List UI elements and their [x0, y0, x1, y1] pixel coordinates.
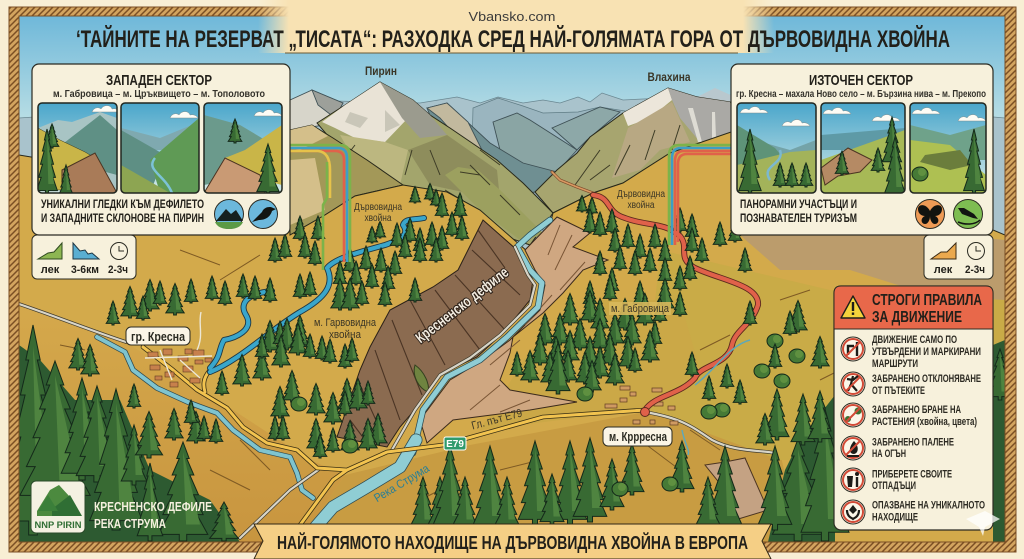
- east caption: [740, 199, 857, 225]
- east tan cliff: [420, 217, 608, 443]
- connector lines: west: [290, 145, 350, 270]
- terrain hachures: [60, 250, 840, 500]
- middle blue range: [472, 98, 626, 230]
- trailhead marker: [640, 408, 650, 416]
- east scene 3: [910, 103, 986, 195]
- label: Kresna gorge: Кресненско дефиле: [413, 264, 512, 347]
- label: Darvovidna hvoyna west: хвойна: [364, 213, 392, 224]
- mountain: Pirin: [317, 82, 553, 245]
- trail stats west: 3-6км: [71, 264, 99, 276]
- logo: NNP Pirin: [31, 481, 85, 533]
- icon: lizard: [954, 200, 982, 228]
- river Struma: [97, 220, 550, 530]
- trail stats east: лек: [934, 264, 953, 276]
- base ground: [19, 132, 1005, 542]
- label: Garvovidna hvoyna: [314, 317, 377, 341]
- label: Gabrovitsa: м. Габровица: [611, 303, 670, 315]
- panel: west sector: [32, 64, 290, 279]
- west caption: [41, 199, 204, 225]
- location caption: КРЕСНЕНСКО ДЕФИЛЕ: [94, 500, 212, 514]
- rule 1: ДВИЖЕНИЕ САМО ПО: [872, 334, 957, 346]
- east scene 2: [821, 103, 905, 197]
- village M. Kresna: [605, 386, 678, 425]
- rule 5: ОТПАДЪЦИ: [872, 480, 916, 492]
- connector lines: east: [669, 145, 731, 245]
- trail: blue west route: [210, 218, 424, 372]
- trail: red east route: [552, 172, 758, 410]
- rule 2: ЗАБРАНЕНО ОТКЛОНЯВАНЕ: [872, 373, 981, 385]
- watermark sparkle: [966, 511, 1000, 536]
- gray roads: [19, 247, 775, 538]
- icon: butterfly: [916, 200, 944, 228]
- rule 3: [841, 403, 977, 428]
- trees: east meadow: [685, 300, 829, 419]
- small stream: [682, 340, 750, 455]
- west heading: ЗАПАДЕН СЕКТОР: [106, 72, 212, 89]
- label: Darvovidna hvoyna east: [617, 189, 665, 211]
- central cliff: [337, 220, 533, 447]
- west scene 2: [121, 103, 199, 193]
- label: Darvovidna hvoyna east: хвойна: [628, 200, 655, 211]
- lower left forest backdrop: [19, 345, 240, 542]
- east scene frames: [737, 103, 986, 193]
- peak label: Vlahina: Влахина: [648, 72, 691, 84]
- far mountain range: [20, 92, 1004, 249]
- trees: east plateau forest: [510, 196, 752, 401]
- rules heading: ЗА ДВИЖЕНИЕ: [872, 309, 962, 326]
- rule 1: [841, 334, 981, 370]
- trail stats west: [38, 242, 128, 276]
- rule 1: УТВЪРДЕНИ И МАРКИРАНИ: [872, 346, 981, 358]
- panel: strict rules: [834, 286, 993, 530]
- sky: [20, 16, 1004, 118]
- label: Darvovidna hvoyna east: Дървовидна: [617, 189, 665, 200]
- rule 6: НАХОДИЩЕ: [872, 512, 918, 524]
- lower valley shading: [64, 385, 344, 542]
- peak label: Pirin: Пирин: [365, 66, 397, 78]
- rule 3: РАСТЕНИЯ (хвойна, цвета): [872, 416, 977, 428]
- icon: viewpoint: [214, 200, 244, 229]
- label: Darvovidna hvoyna west: Дървовидна: [354, 202, 402, 213]
- rule 5: ПРИБЕРЕТЕ СВОИТЕ: [872, 468, 952, 480]
- source label: Vbansko.com: [468, 9, 556, 24]
- icon: warning: [841, 296, 865, 318]
- east caption: ПОЗНАВАТЕЛЕН ТУРИЗЪМ: [740, 213, 857, 225]
- east caption: ПАНОРАМНИ УЧАСТЪЦИ И: [740, 199, 857, 211]
- bottom banner: [254, 524, 771, 559]
- rule 2: [841, 372, 981, 397]
- east scene 1: [737, 103, 816, 195]
- trees: lower left forest: [4, 325, 238, 541]
- road E79: [143, 347, 645, 525]
- west caption: И ЗАПАДНИТЕ СКЛОНОВЕ НА ПИРИН: [41, 213, 204, 225]
- mountain: Vlahina: [535, 88, 745, 213]
- label: Garvovidna hvoyna: м. Гарвовидна: [314, 317, 377, 329]
- west front ridge: [290, 125, 403, 235]
- west scene 3: [204, 103, 282, 195]
- rule 4: НА ОГЪН: [872, 448, 906, 460]
- rule 5: [841, 468, 952, 492]
- icon: bird: [248, 200, 278, 228]
- town label: M Kresna: [603, 427, 672, 446]
- rule 4: [841, 436, 954, 460]
- mountain layers behind: [290, 90, 620, 200]
- rule 3: ЗАБРАНЕНО БРАНЕ НА: [872, 404, 961, 416]
- bottom banner: НАЙ-ГОЛЯМОТО НАХОДИЩЕ НА ДЪРВОВИДНА ХВОЙНА В ЕВРОПА: [277, 532, 748, 553]
- trees: west plateau: [106, 184, 469, 458]
- east brown mountain under panel: [741, 236, 1004, 300]
- village Kresna: [145, 312, 212, 387]
- lower right forest backdrop: [768, 340, 1005, 542]
- rules heading: [872, 292, 982, 326]
- road sign E79: [444, 437, 466, 450]
- label: main road: Гл. път Е79: [470, 407, 524, 433]
- rule 2: ОТ ПЪТЕКИТЕ: [872, 385, 925, 397]
- rule 6: [841, 500, 985, 524]
- town label: Kresna: [126, 327, 190, 345]
- trail stats west: лек: [41, 264, 60, 276]
- town label: Kresna: гр. Кресна: [131, 330, 186, 344]
- road sign E79: E79: [446, 439, 464, 450]
- panel: east sector: [731, 64, 993, 279]
- west caption: УНИКАЛНИ ГЛЕДКИ КЪМ ДЕФИЛЕТО: [41, 199, 204, 211]
- title banner: [76, 0, 950, 53]
- east heading: ИЗТОЧЕН СЕКТОР: [809, 72, 913, 89]
- front ridge detail: [290, 125, 328, 225]
- rule 4: ЗАБРАНЕНО ПАЛЕНЕ: [872, 436, 954, 448]
- location caption: РЕКА СТРУМА: [94, 517, 166, 531]
- rule 1: МАРШРУТИ: [872, 358, 918, 370]
- west scene 1: [37, 103, 120, 195]
- rock bottom right: [705, 458, 768, 520]
- rules heading: СТРОГИ ПРАВИЛА: [872, 292, 982, 309]
- trail stats west: 2-3ч: [108, 264, 128, 276]
- logo: NNP Pirin: NNP PIRIN: [34, 520, 82, 531]
- location caption: [94, 500, 212, 531]
- mini scene frames: [38, 103, 282, 193]
- west subtitle: м. Габровица – м. Цръквището – м. Тополовото: [53, 88, 265, 100]
- trail stats east: 2-3ч: [965, 264, 985, 276]
- trees: bottom band: [411, 349, 1012, 541]
- label: Garvovidna hvoyna: хвойна: [329, 329, 362, 341]
- map labels: [126, 189, 672, 505]
- label: Struma river: Река Струма: [371, 461, 432, 505]
- label: Darvovidna hvoyna west: [354, 202, 402, 224]
- trail stats east: [931, 242, 985, 276]
- town label: M Kresna: м. Кррресна: [609, 430, 668, 444]
